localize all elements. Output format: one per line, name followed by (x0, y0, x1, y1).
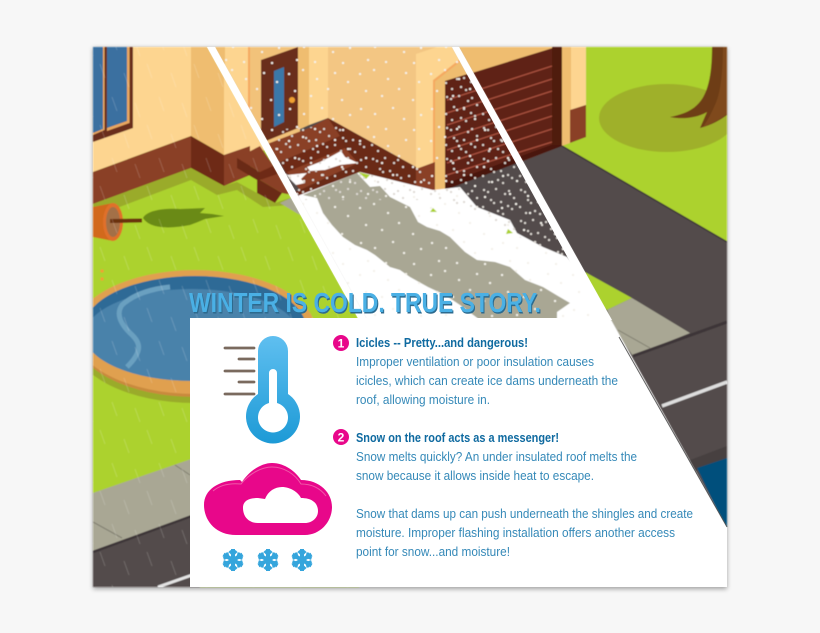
house wall (92, 46, 264, 172)
badge: number 1 (333, 335, 349, 351)
text block: snow on the roof: point for snow...and moisture! (356, 545, 510, 559)
panel: text card (190, 318, 727, 587)
pool (74, 270, 316, 403)
text block: snow on the roof (356, 431, 693, 559)
badge: number 2 (333, 429, 349, 445)
text block: snow on the roof: Snow that dams up can push underneath the shingles and create (356, 507, 693, 521)
card shadow (93, 48, 727, 589)
front sidewalk (607, 298, 690, 356)
driveway snow (292, 172, 610, 320)
panel: snow scene (215, 47, 615, 322)
lawn edge shadow (92, 168, 290, 208)
driveway gravel (303, 173, 570, 320)
tree trunk (670, 47, 727, 128)
green tufts (358, 172, 513, 234)
snow on steps (287, 151, 358, 185)
plant shadow (143, 208, 224, 227)
orange dots (100, 271, 104, 279)
text block: snow on the roof: snow because it allows inside heat to escape. (356, 469, 594, 483)
text block: icicles: Icicles -- Pretty...and dangerous! (356, 336, 528, 350)
text block: snow on the roof: Snow on the roof acts as a messenger! (356, 431, 559, 445)
text block: icicles: roof, allowing moisture in. (356, 393, 490, 407)
white diagonal strip right (452, 47, 612, 320)
house walls (214, 46, 467, 190)
icon: snowflakes (224, 549, 312, 571)
icon: cloud (204, 463, 332, 535)
text block: icicles (356, 336, 618, 407)
street (633, 322, 727, 530)
panel: dry scene (459, 47, 735, 530)
door (261, 47, 298, 143)
text block: icicles: icicles, which can create ice dams underneath the (356, 374, 618, 388)
garage right side (458, 46, 587, 162)
white diagonal strip left (207, 47, 367, 320)
garage door (444, 74, 516, 188)
falling snow (215, 47, 615, 322)
infographic card (90, 45, 730, 592)
title: WINTER IS COLD. TRUE STORY. (190, 288, 542, 320)
brick base (328, 118, 436, 190)
badge: number 2: 2 (338, 430, 345, 444)
title: WINTER IS COLD. TRUE STORY. (189, 287, 541, 318)
window (93, 47, 133, 142)
text block: snow on the roof: moisture. Improper flashing installation offers another access (356, 526, 675, 540)
text block: icicles: Improper ventilation or poor insulation causes (356, 355, 594, 369)
text block: snow on the roof: Snow melts quickly? An under insulated roof melts the (356, 450, 637, 464)
badge: number 1: 1 (338, 336, 345, 350)
front lawn corner (585, 272, 632, 310)
rain (93, 47, 363, 587)
flower pot (93, 203, 142, 241)
steps (268, 118, 358, 196)
panel: rain scene (74, 47, 363, 587)
sidewalk and road (93, 456, 200, 587)
brick base and steps (93, 136, 297, 204)
lawn (562, 47, 727, 242)
tree shadow (599, 84, 735, 152)
icon: thermometer (225, 336, 300, 443)
